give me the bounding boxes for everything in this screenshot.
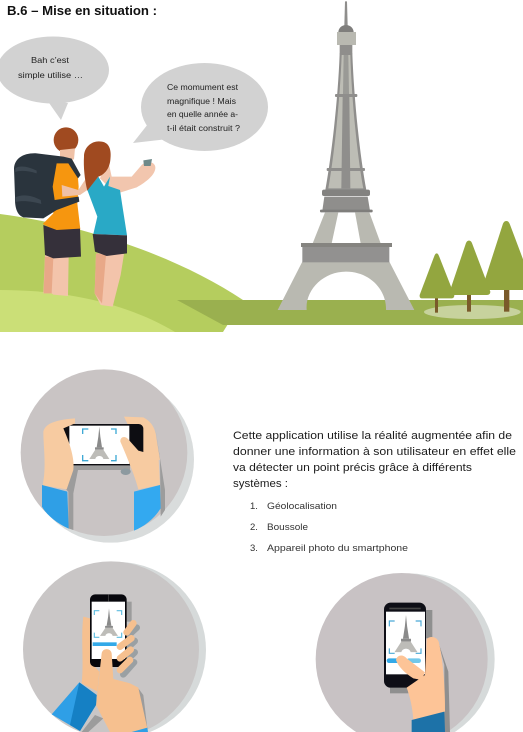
numbered list: 2. bbox=[250, 522, 258, 533]
text block: explanation bbox=[233, 430, 516, 490]
hill: light green bbox=[0, 290, 175, 332]
Eiffel Tower bbox=[278, 1, 414, 310]
speech bubble: man: Bah c’est bbox=[31, 55, 70, 65]
speech bubble: man: simple utilise … bbox=[18, 70, 83, 80]
speech bubble: woman: en quelle année a- bbox=[167, 110, 238, 119]
text block: explanation: donner une information à son utilisateur en effet elle bbox=[233, 446, 516, 458]
scene: tourists and Eiffel Tower landscape bbox=[0, 1, 523, 332]
hill: dark green bbox=[0, 214, 243, 332]
illustration: finger tapping on phone bbox=[23, 561, 206, 732]
speech bubble: woman: t-il était construit ? bbox=[167, 124, 241, 133]
trees bbox=[420, 221, 523, 319]
numbered list: 3. bbox=[250, 543, 258, 554]
text block: explanation: va détecter un point précis grâce à différents bbox=[233, 462, 472, 474]
illustration: one hand holding phone bbox=[316, 573, 495, 732]
title: B.6 – Mise en situation : bbox=[7, 4, 157, 18]
numbered list: 1. bbox=[250, 501, 258, 512]
mini tower bbox=[394, 615, 417, 652]
man bbox=[14, 127, 87, 296]
ground strip bbox=[177, 300, 523, 325]
illustration: phone held horizontally bbox=[21, 369, 194, 543]
numbered list bbox=[250, 501, 408, 554]
text block: explanation: Cette application utilise la réalité augmentée afin de bbox=[233, 430, 512, 442]
speech bubble: woman: Ce momument est bbox=[167, 83, 239, 92]
text block: explanation: systèmes : bbox=[233, 478, 288, 490]
tourists bbox=[14, 127, 155, 307]
numbered list: Appareil photo du smartphone bbox=[267, 543, 408, 554]
speech bubble: woman bbox=[133, 63, 268, 151]
numbered list: Géolocalisation bbox=[267, 501, 337, 512]
speech bubble: woman: magnifique ! Mais bbox=[167, 97, 236, 106]
numbered list: Boussole bbox=[267, 522, 308, 533]
speech bubble: man bbox=[0, 36, 109, 120]
woman bbox=[84, 141, 155, 307]
mini tower bbox=[100, 608, 118, 636]
mini tower bbox=[89, 427, 109, 459]
